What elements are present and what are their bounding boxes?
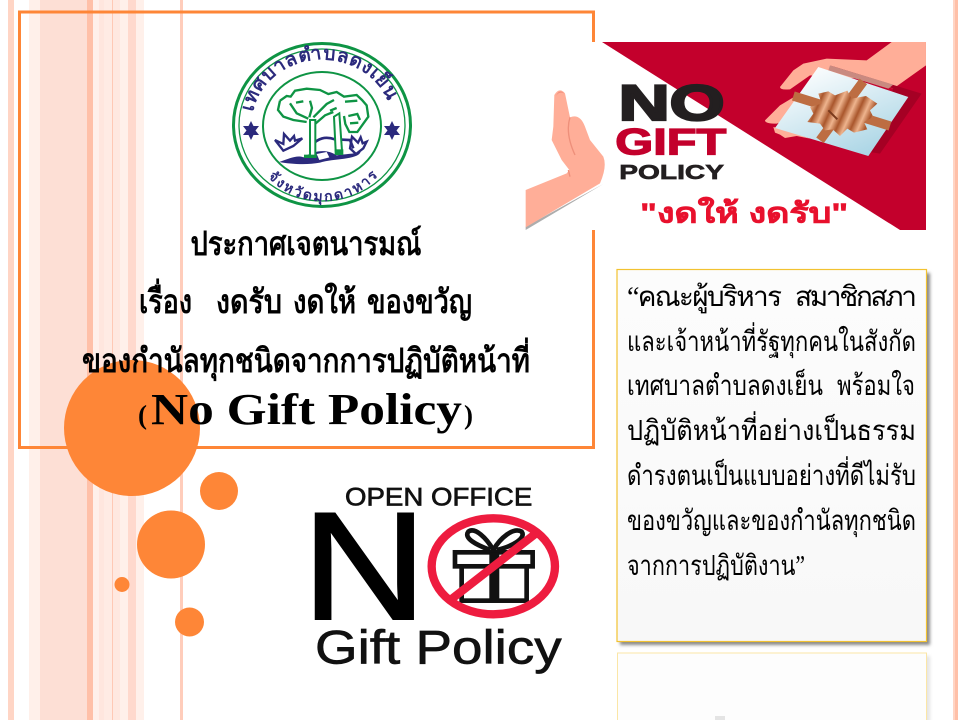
heading line two [139, 278, 472, 321]
pledge text: สมาชิกสภา [795, 282, 917, 313]
emblem: municipality seal: จังหวัดมุกดาหาร [270, 170, 377, 206]
pledge text: พร้อมใจ [837, 369, 915, 402]
panel: announcement frame [20, 12, 594, 448]
slogan: "งดให้ งดรับ" [640, 197, 848, 229]
heading line two: งดรับ [216, 285, 282, 321]
icon: prohibited gift [432, 518, 555, 614]
icon: hand with gift box [765, 42, 926, 156]
graphic: open office no gift policy [302, 481, 562, 674]
heading line two: เรื่อง [139, 278, 192, 321]
pledge text [627, 282, 917, 582]
heading line two: ของขวัญ [367, 285, 472, 321]
decorative orange circles [64, 360, 238, 636]
heading line four: ( [138, 400, 147, 430]
heading line four: ) [464, 400, 473, 430]
heading line four: No Gift Policy [151, 385, 462, 434]
panel: pledge statement [617, 270, 930, 645]
pledge text: เทศบาลตำบลดงเย็น [627, 368, 823, 402]
title: announcement heading: ประกาศเจตนารมณ์ [190, 225, 422, 263]
NO GIFT POLICY wordmark: NO [619, 75, 725, 131]
pledge text: “คณะผู้บริหาร [627, 282, 782, 314]
banner: no gift policy image [526, 42, 926, 230]
pledge text: ปฏิบัติหน้าที่อย่างเป็นธรรม [627, 411, 916, 447]
NO GIFT POLICY wordmark [615, 75, 727, 184]
heading line two: งดให้ [293, 282, 356, 321]
label: gift policy: Gift Policy [315, 621, 562, 674]
pledge text: จากการปฏิบัติงาน” [627, 551, 805, 582]
NO GIFT POLICY wordmark: GIFT [615, 121, 727, 163]
trees [278, 89, 368, 156]
NO GIFT POLICY wordmark: POLICY [619, 162, 724, 184]
title: announcement heading: ของกำนัลทุกชนิดจากการปฏิบัติหน้าที่ [82, 337, 530, 382]
title: announcement heading [82, 225, 530, 434]
label: open office: OPEN OFFICE [345, 484, 532, 512]
icon: refusing hand [526, 90, 605, 230]
emblem: municipality seal [232, 42, 412, 208]
panel: second text box (empty, cropped) [618, 653, 930, 720]
emblem: municipality seal: เทศบาลตำบลดงเย็น [242, 45, 397, 110]
landscape [275, 134, 367, 164]
large letter N: N [302, 481, 427, 652]
